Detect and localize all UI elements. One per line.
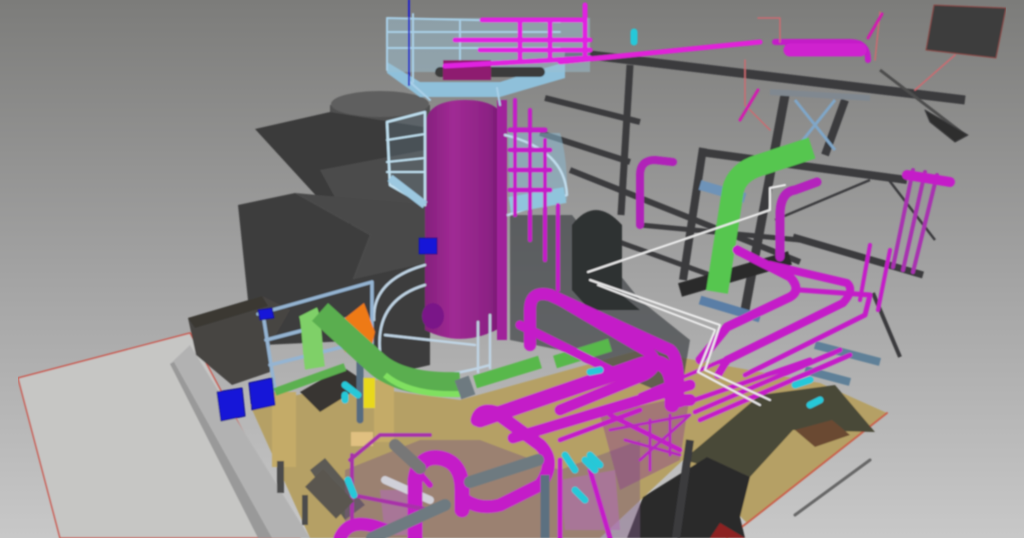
- magenta pipework: [340, 5, 950, 538]
- cyan valves: [345, 32, 820, 500]
- top magenta accent: [740, 14, 882, 120]
- vessel near column: [572, 210, 640, 310]
- grey pipes: [314, 385, 545, 538]
- dark buildings: [188, 91, 430, 385]
- foreground dark machinery: [627, 385, 875, 538]
- dark corner block: [926, 5, 1006, 58]
- platform supports: [272, 367, 394, 525]
- site floor outline: [18, 333, 310, 538]
- top platform and railings: [387, 0, 590, 105]
- purple column: [422, 100, 507, 340]
- white pipe run: [588, 185, 785, 405]
- dense equipment at plant base: [345, 395, 690, 538]
- mid platform and railings: [258, 112, 567, 390]
- blue valve boxes: [217, 238, 437, 421]
- steel frame: [540, 52, 968, 538]
- tan platform: [250, 350, 887, 538]
- orange equipment: [340, 303, 375, 420]
- right-edge railing: [745, 12, 955, 130]
- dark pipe-rack backdrop: [510, 215, 690, 400]
- green duct: [275, 148, 812, 394]
